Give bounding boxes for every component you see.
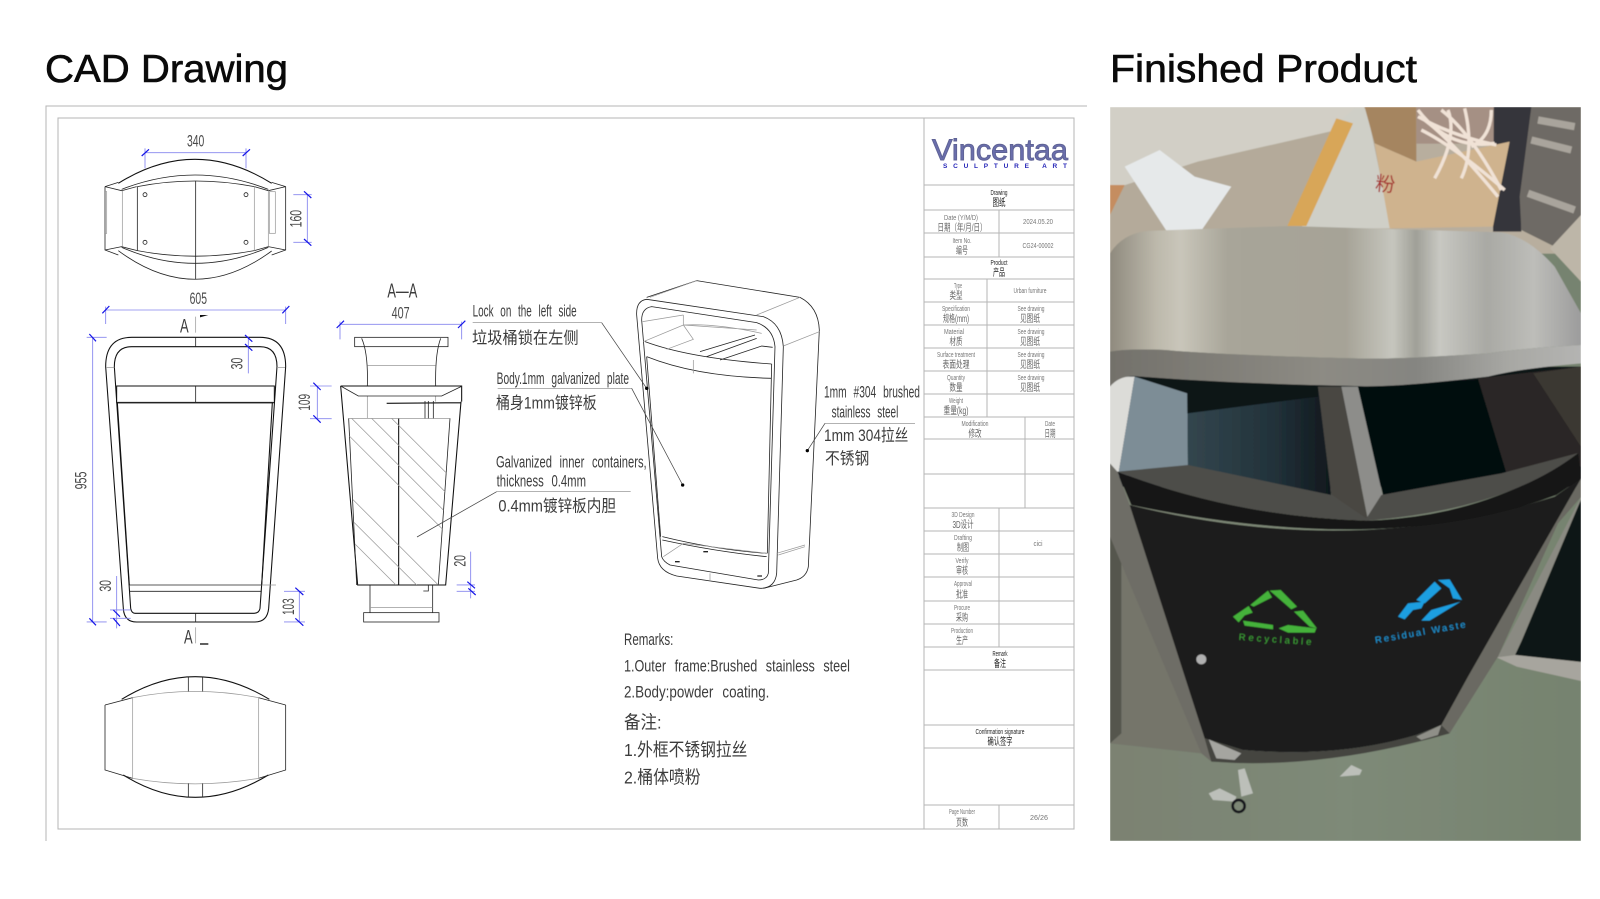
table rows: drawing info: 编号 [956,244,968,257]
table rows: approvals and signature: 采购 [956,611,968,624]
table rows: drawing info: 日期（年/月/日） [938,221,986,234]
table rows: drawing info [938,190,1054,279]
text block: remarks: 备注: [624,713,662,733]
table rows: approvals and signature: Confirmation signature [976,729,1025,736]
table rows: product specification: Weight [949,398,963,405]
logo: Vincentaa Sculpture Art: Vincentaa [932,134,1068,167]
table rows: approvals and signature: 26/26 [1030,815,1048,822]
drawing: front view with dimensions: 103 [279,598,298,615]
drawing: section view A-A: 407 [392,303,410,322]
drawing: section view A-A: 109 [295,394,314,411]
callouts: annotations with leader lines: 0.4mm镀锌板内胆 [498,497,616,516]
table rows: product specification: 见图纸 [1020,335,1040,348]
drawing: front view with dimensions: A [184,627,193,648]
drawing: bottom view [105,677,286,797]
table rows: approvals and signature: 制图 [957,541,969,554]
table rows: product specification: Specification [942,306,970,313]
table rows: product specification: Surface treatment [937,352,975,359]
text block: remarks: 1.Outer frame:Brushed stainless steel [624,657,850,676]
panel: CAD drawing sheet [46,106,1087,841]
drawing: isometric view of bin [637,281,819,588]
table rows: product specification: 见图纸 [1020,312,1040,325]
base of the bin [1205,725,1450,763]
text block: remarks [624,630,850,788]
warehouse background: 粉 [1374,172,1396,197]
title: Finished Product: Finished Product [1110,48,1417,91]
table rows: product specification: See drawing [1018,329,1045,336]
table rows: approvals and signature: 页数 [956,816,968,829]
table rows: product specification: Material [944,329,964,336]
recycling symbol and label: Recyclable [1233,590,1317,647]
callouts: annotations with leader lines: 1mm 304拉丝 [824,426,908,445]
table rows: product specification: 重量(kg) [944,404,968,417]
drawing: top view with dimensions: 160 [287,210,306,227]
table rows: approvals and signature: Remark [992,651,1008,658]
drawing: front view with dimensions [72,289,305,648]
drawing: top view with dimensions: 340 [187,132,204,151]
table rows: product specification: Date [1045,421,1055,428]
table rows: approvals and signature: 批准 [956,588,968,601]
lid [1110,226,1581,359]
callouts: annotations with leader lines [417,302,920,537]
drawing: front view with dimensions: A [180,317,189,338]
callouts: annotations with leader lines: 不锈钢 [825,449,869,468]
table rows: product specification: 表面处理 [942,358,970,371]
table rows: drawing info: 产品 [993,266,1005,279]
table rows: product specification: Type [954,283,962,290]
callouts: annotations with leader lines: 桶身1mm镀锌板 [496,393,597,412]
recycling symbol and label: Recyclable: Recyclable [1239,632,1312,647]
table rows: drawing info: 2024.05.20 [1023,219,1053,226]
table rows: product specification: Modification [962,421,989,428]
table rows: drawing info: 图纸 [992,196,1006,209]
table rows: product specification: 修改 [968,427,982,440]
table rows: approvals and signature: 3D设计 [952,518,974,531]
drawing: top view with dimensions [105,132,312,279]
drawing: section view A-A: 20 [450,555,469,567]
table rows: product specification: 见图纸 [1020,381,1040,394]
table rows: approvals and signature: 确认签字 [988,735,1012,748]
table rows: approvals and signature: Page Number [949,809,975,816]
drawing: front view with dimensions: 605 [190,289,207,308]
table rows: product specification: 日期 [1044,428,1056,440]
table rows: product specification: Urban furniture [1014,288,1047,295]
table rows: approvals and signature: cici [1034,541,1043,548]
table rows: product specification: See drawing [1018,352,1045,359]
text block: remarks: 1.外框不锈钢拉丝 [624,740,747,760]
drawing: section view A-A: A—A [387,280,418,302]
table rows: product specification: Quantity [947,375,965,382]
warehouse background [1110,107,1581,282]
table rows: product specification: See drawing [1018,306,1045,313]
bin body and rim [1130,478,1581,752]
photo: finished product [1110,107,1581,841]
logo: Vincentaa Sculpture Art: SCULPTURE ART [943,163,1067,170]
text block: remarks: Remarks: [624,630,673,649]
table rows: drawing info: Date (Y/M/D) [944,215,978,222]
text block: remarks: 2.桶体喷粉 [624,768,701,788]
table rows: approvals and signature: Drafting [954,535,972,542]
table rows: product specification: 见图纸 [1020,358,1040,371]
recycling symbol and label: Residual Waste [1374,579,1466,645]
table rows: approvals and signature: 3D Design [952,512,975,519]
callouts: annotations with leader lines: Lock on the left side [473,302,577,321]
table rows: drawing info: CG24-00002 [1022,243,1054,250]
table rows: approvals and signature: Procure [954,605,970,612]
table rows: approvals and signature: Verify [956,558,969,565]
table rows: approvals and signature: 备注 [994,657,1006,670]
recycling symbol and label: Residual Waste: Residual Waste [1374,620,1466,645]
callouts: annotations with leader lines: 1mm #304 brushed [824,382,920,401]
surroundings on the floor [1110,497,1581,753]
callouts: annotations with leader lines: Galvanized inner containers, [496,452,647,471]
litter on floor [1196,654,1362,812]
drawing: front view with dimensions: 30 [96,580,115,592]
table rows: approvals and signature: Approval [954,581,972,588]
table rows: product specification: 数量 [950,381,962,394]
table rows: approvals and signature: 审核 [956,564,968,577]
left and right steel frame [1110,463,1581,762]
callouts: annotations with leader lines: 垃圾桶锁在左侧 [472,328,579,347]
table rows: product specification: See drawing [1018,375,1045,382]
drawing: front view with dimensions: 955 [72,472,91,489]
table rows: approvals and signature [949,512,1048,829]
drawing: front view with dimensions: 30 [228,358,247,369]
table rows: product specification: 类型 [950,289,962,302]
bin interior [1110,367,1581,520]
panel: title block table [924,118,1074,829]
table rows: product specification [937,283,1056,440]
text block: remarks: 2.Body:powder coating. [624,682,769,701]
callouts: annotations with leader lines: Body.1mm galvanized plate [497,369,629,388]
drawing: section view A-A [295,280,476,622]
table rows: approvals and signature: Production [951,628,973,635]
callouts: annotations with leader lines: stainless steel [832,402,898,421]
table rows: drawing info: Drawing [990,190,1008,197]
table rows: drawing info: Item No. [952,238,972,245]
table rows: approvals and signature: 生产 [956,634,968,647]
title: CAD Drawing: CAD Drawing [45,48,288,91]
table rows: product specification: 材质 [950,335,962,348]
table rows: product specification: 规格(mm) [943,312,969,325]
callouts: annotations with leader lines: thickness 0.4mm [497,472,586,491]
table rows: drawing info: Product [990,260,1008,267]
